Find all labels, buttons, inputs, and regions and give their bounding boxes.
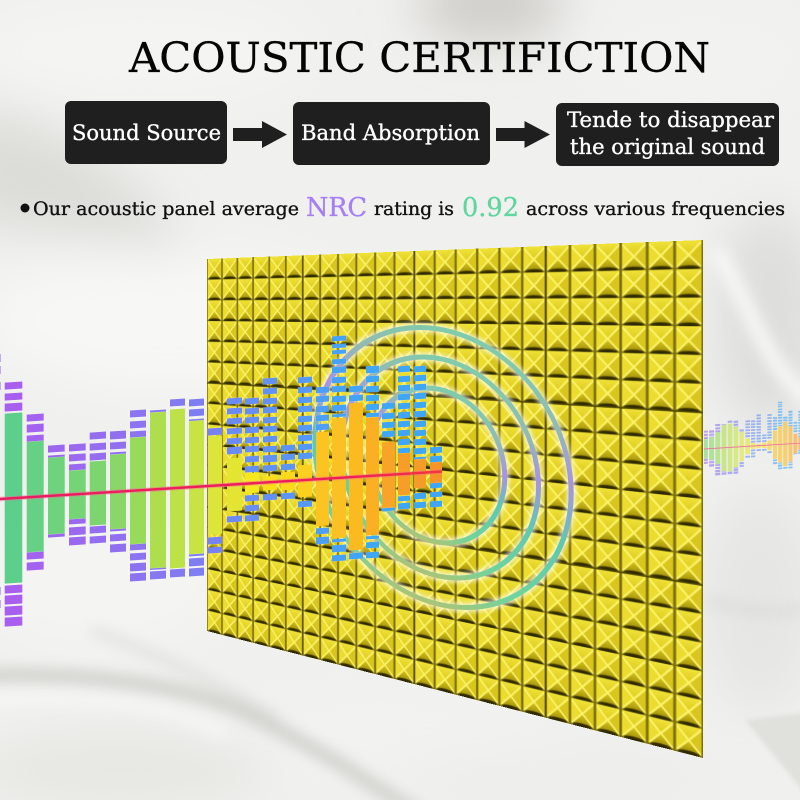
bar 23	[414, 366, 426, 508]
NRC rating statement: across various frequencies	[526, 198, 785, 220]
bar 13	[245, 398, 259, 521]
acoustic foam panel with pyramid tiles	[207, 240, 703, 758]
process step: disappear the original sound	[556, 103, 779, 166]
red frequency line	[0, 472, 442, 499]
bar 1	[5, 381, 22, 627]
bar 12	[227, 397, 242, 522]
bar 19	[349, 386, 363, 559]
NRC rating statement	[20, 193, 785, 223]
process step: Band Absorption	[293, 102, 490, 165]
title: ACOUSTIC CERTIFICTION	[128, 34, 710, 82]
bar 18	[332, 336, 346, 561]
bar 2	[27, 413, 44, 571]
NRC rating statement: Our acoustic panel average	[33, 198, 299, 220]
bar 10	[189, 399, 204, 577]
bar 24	[430, 447, 442, 507]
bar 16	[298, 377, 312, 507]
bar 8	[150, 410, 166, 580]
NRC rating statement: rating is	[374, 198, 454, 220]
bar 22	[398, 366, 410, 509]
bar 20	[366, 366, 379, 558]
process step: Sound Source: Sound Source	[72, 121, 221, 145]
bar 5	[90, 432, 106, 544]
process step: Sound Source	[65, 101, 227, 164]
NRC rating statement: 0.92	[462, 193, 519, 223]
bar 7	[130, 410, 146, 582]
main sound waveform bars	[0, 336, 442, 627]
concentric absorption rings	[294, 328, 592, 608]
bar 6	[110, 431, 126, 553]
arrow 2	[496, 121, 550, 148]
bar 17	[316, 387, 329, 544]
bar 0 sliver	[0, 354, 1, 608]
NRC rating statement: NRC	[306, 193, 367, 223]
process step: disappear the original sound: the original sound	[570, 135, 765, 159]
miniature waveform passing through right of the panel	[704, 402, 800, 476]
bar 15	[281, 445, 295, 499]
bar 9	[170, 398, 185, 577]
arrow 1	[233, 121, 287, 148]
bar 11	[208, 428, 222, 553]
process step: disappear the original sound: Tende to disappear	[567, 108, 775, 132]
foreground layer: rings, waveform and header	[0, 40, 800, 627]
bar 21	[382, 403, 395, 511]
bar 3	[48, 444, 65, 538]
process step: Band Absorption: Band Absorption	[301, 121, 480, 145]
bar 4	[69, 443, 86, 546]
bar 14	[263, 378, 277, 501]
